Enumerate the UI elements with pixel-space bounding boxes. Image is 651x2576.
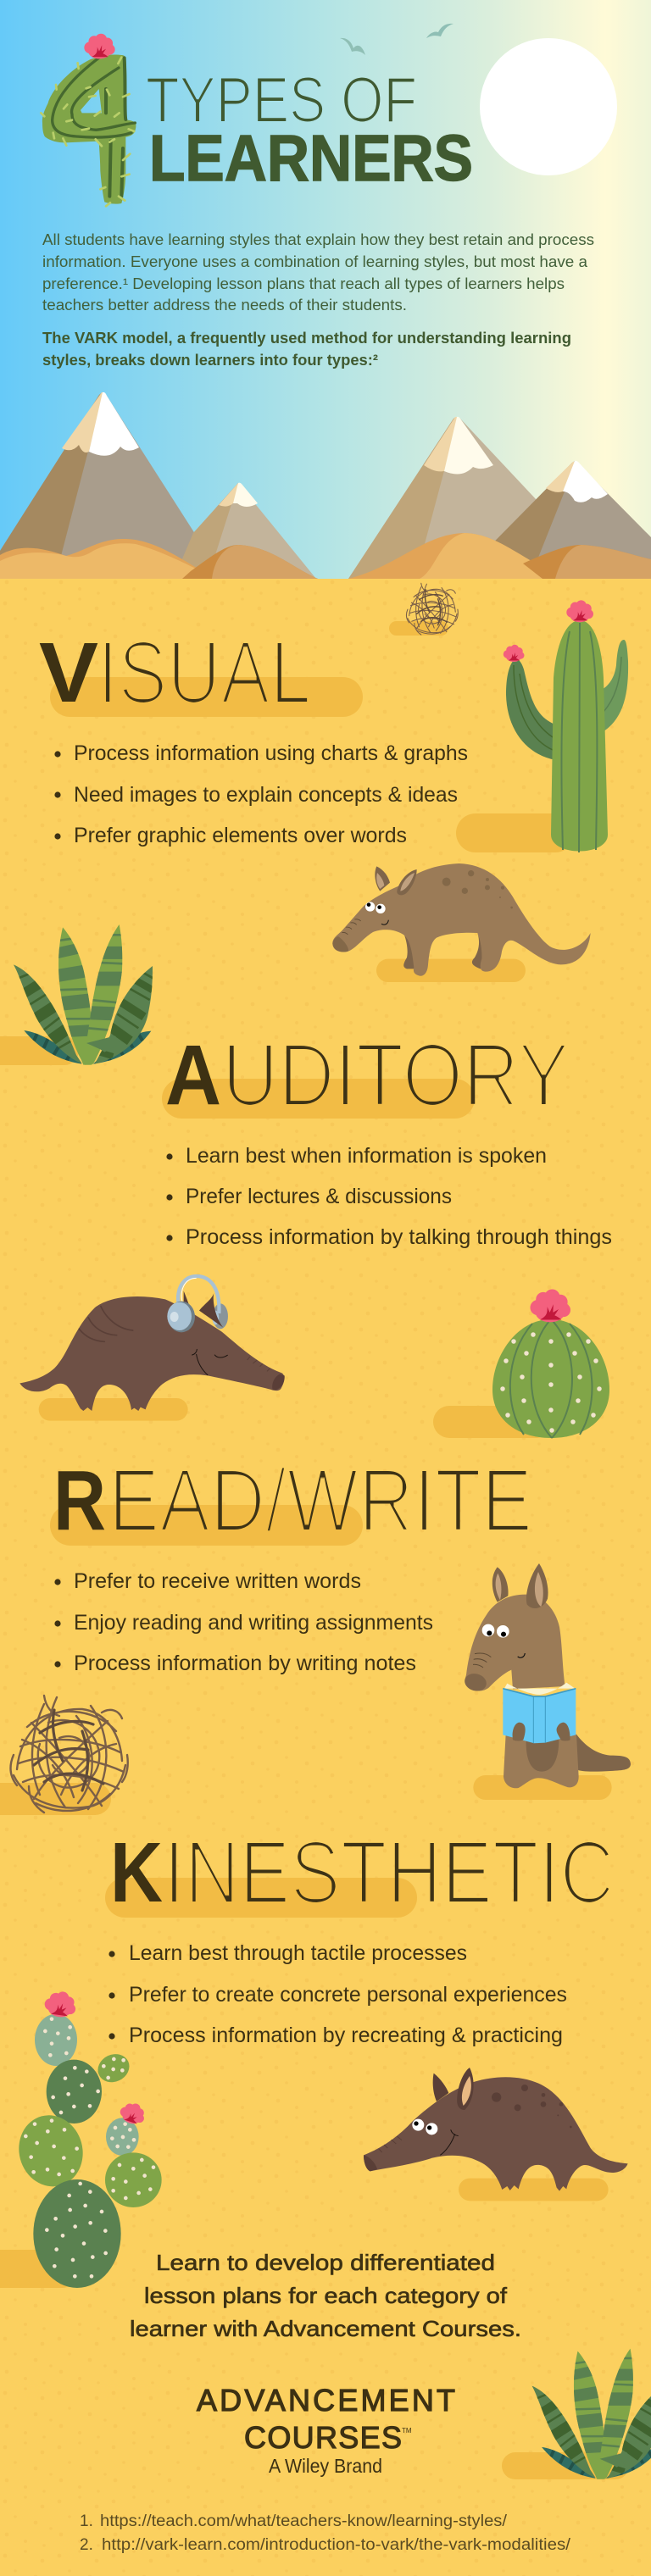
list: read/write traits: Enjoy reading and writing assignments	[74, 1611, 433, 1635]
icon: small tumbleweed	[389, 583, 458, 636]
list: kinesthetic traits: Learn best through tactile processes	[129, 1941, 467, 1965]
logo: advancement courses	[197, 2383, 455, 2477]
list: read/write traits	[54, 1569, 433, 1675]
panel: read/write	[50, 1451, 532, 1675]
list: auditory traits: Prefer lectures & discussions	[186, 1185, 452, 1208]
icon: dark aardvark smiling	[364, 2068, 628, 2201]
logo: advancement courses: COURSES	[244, 2420, 402, 2455]
heading: auditory: UDITORY	[222, 1025, 570, 1125]
references	[80, 2512, 571, 2554]
background: sky gradient	[0, 0, 651, 579]
list: kinesthetic traits: Prefer to create concrete personal experiences	[129, 1983, 567, 2007]
sand dunes	[0, 533, 651, 579]
heading: read/write: EAD/WRITE	[108, 1451, 532, 1551]
heading: auditory: A	[165, 1028, 221, 1123]
icon: aardvark reading a book	[463, 1563, 631, 1800]
icon: saguaro cactus	[456, 600, 628, 852]
icon: prickly pear cactus	[0, 1990, 162, 2288]
list: visual traits	[54, 741, 468, 847]
heading: kinesthetic: K	[110, 1825, 163, 1920]
icon: sun	[480, 38, 617, 175]
icon: aardvark with headphones	[19, 1276, 285, 1421]
list: auditory traits: Process information by talking through things	[186, 1225, 612, 1249]
call to action: Learn to develop differentiated	[156, 2250, 495, 2275]
call to action: learner with Advancement Courses.	[130, 2316, 521, 2341]
panel: auditory	[162, 1025, 612, 1249]
title: TYPES OF	[146, 64, 417, 136]
panel: visual	[39, 623, 468, 847]
intro paragraph: teachers better address the needs of their students.	[42, 297, 407, 314]
VARK statement: The VARK model, a frequently used method for understanding learning	[42, 330, 571, 347]
VARK statement: styles, breaks down learners into four types:²	[42, 352, 378, 369]
list: kinesthetic traits	[108, 1941, 567, 2047]
heading: visual: V	[39, 625, 98, 720]
references: 2.	[80, 2536, 93, 2554]
icon: cactus number 4	[41, 34, 136, 206]
references: 1.	[80, 2512, 93, 2530]
list: auditory traits: Learn best when information is spoken	[186, 1144, 547, 1168]
logo: advancement courses: TM	[402, 2427, 412, 2434]
list: read/write traits: Process information by writing notes	[74, 1652, 416, 1675]
call to action	[130, 2250, 521, 2341]
intro paragraph: preference.¹ Developing lesson plans that reach all types of learners helps	[42, 275, 565, 292]
list: visual traits: Need images to explain concepts & ideas	[74, 783, 458, 807]
mountains	[0, 392, 651, 579]
icon: large tumbleweed	[0, 1696, 128, 1815]
icon: aloe plant left	[0, 924, 154, 1065]
icon: aardvark standing	[332, 863, 591, 982]
references: http://vark-learn.com/introduction-to-vark/the-vark-modalities/	[102, 2536, 571, 2554]
intro paragraph: information. Everyone uses a combination of learning styles, but most have a	[42, 253, 588, 270]
title	[146, 64, 473, 195]
icon: barrel cactus	[433, 1289, 609, 1438]
icon: birds	[340, 24, 453, 55]
panel: kinesthetic	[105, 1823, 615, 2047]
list: read/write traits: Prefer to receive written words	[74, 1569, 361, 1593]
title: LEARNERS	[149, 122, 473, 195]
intro paragraph	[42, 231, 594, 314]
list: auditory traits	[166, 1144, 612, 1249]
intro paragraph: All students have learning styles that explain how they best retain and process	[42, 231, 594, 248]
icon: aloe plant right	[502, 2349, 651, 2479]
logo: advancement courses: A Wiley Brand	[269, 2455, 382, 2477]
list: kinesthetic traits: Process information by recreating & practicing	[129, 2024, 563, 2047]
heading: read/write: R	[53, 1453, 106, 1548]
list: visual traits: Process information using charts & graphs	[74, 741, 468, 765]
call to action: lesson plans for each category of	[144, 2283, 508, 2308]
references: https://teach.com/what/teachers-know/learning-styles/	[100, 2512, 508, 2530]
heading: visual: ISUAL	[97, 623, 311, 723]
VARK statement	[42, 330, 571, 369]
logo: advancement courses: ADVANCEMENT	[197, 2383, 455, 2418]
list: visual traits: Prefer graphic elements over words	[74, 824, 407, 847]
